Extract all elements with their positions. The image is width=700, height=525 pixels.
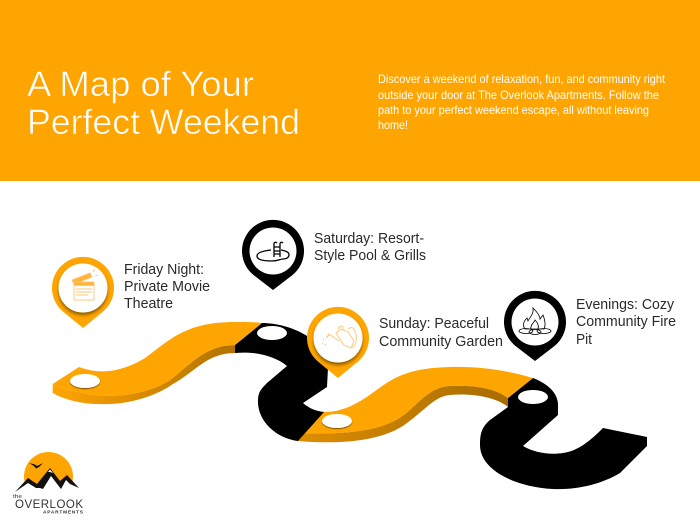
label: Evenings [576,296,676,348]
logo: The Overlook Apartments [13,452,84,516]
label: Friday: Friday Night: [124,261,204,278]
title [27,65,300,142]
label: Saturday: Style Pool & Grills [314,247,426,264]
logo bird [29,463,43,468]
label: Friday [124,261,210,312]
title: Perfect Weekend [27,103,300,142]
label: Sunday: Community Garden [379,333,503,350]
icon: campfire [519,308,551,334]
path segment: orange second stretch top [298,367,533,433]
label: Evenings: Evenings: Cozy [576,296,674,313]
waypoint 4 [518,390,548,404]
label: Evenings: Community Fire [576,313,676,330]
waypoint 2 [257,326,287,340]
logo wordmark [13,494,84,516]
intro text: home! [378,118,408,132]
icon: watering can [322,326,356,348]
label: Sunday: Sunday: Peaceful [379,315,489,332]
path segment: orange second stretch side [298,386,508,442]
pin: Friday movie theatre [52,257,114,328]
icon: clapperboard [72,269,98,300]
label: Evenings: Pit [576,331,593,348]
intro text: outside your door at The Overlook Apartments. Follow the [378,88,659,102]
intro text: path to your perfect weekend escape, all without leaving [378,103,649,117]
pin: Evenings fire pit [504,291,566,361]
intro text [378,72,666,132]
logo wordmark: OVERLOOK [15,499,83,511]
logo mountain base [15,469,78,503]
path segment: orange first stretch top [53,322,262,396]
intro text: Discover a weekend of relaxation, fun, and community right [378,72,666,86]
label: Sunday [379,315,503,350]
logo mountains [15,468,79,492]
path segment: black second bend [480,378,647,489]
winding path [53,322,647,489]
path segment: orange first stretch side [53,345,235,404]
logo wordmark: the [13,494,22,500]
logo wordmark: APARTMENTS [43,510,84,516]
path segment: black first bend [235,323,328,441]
waypoint markers on the path [70,326,548,428]
waypoint 1 [70,374,100,388]
label: Friday: Theatre [124,295,173,312]
header band [0,0,700,181]
logo sun [24,452,73,501]
title: A Map of Your [27,65,254,104]
waypoint 3 [322,414,352,428]
icon: pool with ladder [257,242,289,261]
label: Saturday [314,230,426,264]
logo snow caps [48,470,53,473]
label: Saturday: Saturday: Resort- [314,230,424,247]
label: Friday: Private Movie [124,278,210,295]
pin: Sunday garden [307,307,369,378]
pin: Saturday pool [242,220,304,290]
